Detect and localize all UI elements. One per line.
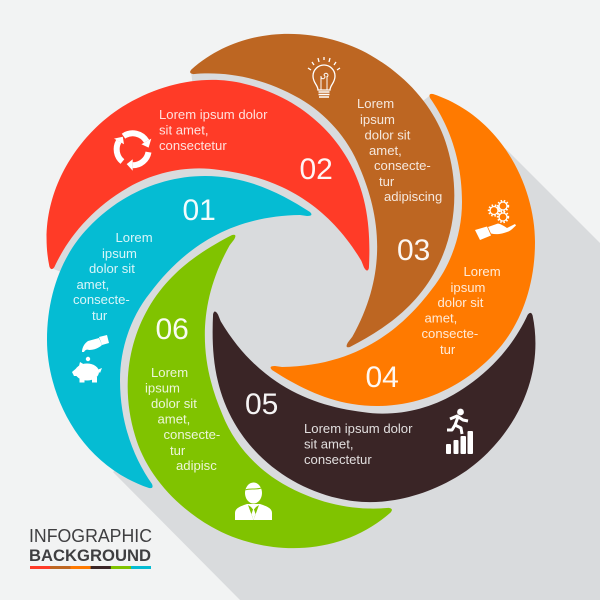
number 04: 04 xyxy=(366,361,399,394)
text block 02: Lorem ipsum dolor xyxy=(159,107,268,122)
text block 04: amet, xyxy=(424,310,457,326)
text block 02: consectetur xyxy=(159,138,227,153)
text block 04: Lorem xyxy=(464,264,501,279)
icon: hand and piggy bank xyxy=(72,335,109,382)
panel: 02 red xyxy=(0,22,401,407)
text block 01: amet, xyxy=(76,277,109,292)
text block 01: consecte- xyxy=(73,292,130,307)
colour bar xyxy=(30,566,151,569)
text block 06: tur xyxy=(170,443,186,458)
number 05: 05 xyxy=(245,388,278,421)
text block 03: dolor sit xyxy=(364,128,411,142)
text block 06: amet, xyxy=(158,412,190,426)
text block 04 xyxy=(422,264,501,357)
text block 02 xyxy=(159,107,268,153)
text block 03: Lorem xyxy=(357,96,394,111)
text block 06: consecte- xyxy=(164,427,220,442)
gap bands xyxy=(60,33,522,549)
text block 06: ipsum xyxy=(145,380,180,396)
text block 01: ipsum xyxy=(102,246,137,261)
icon: hand with gears xyxy=(475,201,516,240)
icon: light bulb xyxy=(308,57,340,97)
text block 05: Lorem ipsum dolor xyxy=(304,421,413,436)
text block 05: sit amet, xyxy=(304,436,353,452)
text block 01: Lorem xyxy=(116,230,153,245)
icon: runner on bars xyxy=(446,409,473,454)
number 03: 03 xyxy=(397,234,430,267)
text block 03: adipiscing xyxy=(384,189,442,204)
text block 01: dolor sit xyxy=(89,261,135,276)
text block 03: amet, xyxy=(369,143,402,158)
text block 03: tur xyxy=(379,174,395,189)
text block 06: dolor sit xyxy=(151,396,197,411)
title xyxy=(29,525,152,565)
number 06: 06 xyxy=(156,313,189,346)
text block 06: adipisc xyxy=(176,458,217,473)
title: BACKGROUND xyxy=(29,546,151,565)
text block 04: ipsum xyxy=(450,280,486,295)
panel: 04 orange xyxy=(271,94,535,406)
panel: 01 blue xyxy=(47,176,311,488)
panel: 05 dark xyxy=(181,175,584,560)
text block 05: consectetur xyxy=(304,452,372,467)
text block 04: dolor sit xyxy=(438,295,484,310)
long shadow xyxy=(113,148,600,600)
title: INFOGRAPHIC xyxy=(29,525,152,546)
text block 05 xyxy=(304,421,413,467)
text block 06 xyxy=(145,365,220,473)
text block 03: ipsum xyxy=(360,112,395,127)
text block 03: consecte- xyxy=(374,158,431,173)
text block 03 xyxy=(357,96,442,204)
text block 04: consecte- xyxy=(422,326,478,341)
text block 01: tur xyxy=(92,308,108,323)
icon: businessman xyxy=(235,482,272,520)
text block 04: tur xyxy=(440,342,456,357)
text block 02: sit amet, xyxy=(159,122,208,138)
panel: 06 green xyxy=(69,216,472,600)
number 01: 01 xyxy=(182,194,216,227)
text block 06: Lorem xyxy=(151,365,188,380)
text block 01 xyxy=(73,230,153,323)
number 02: 02 xyxy=(300,153,333,186)
panel: 03 brown xyxy=(110,0,513,366)
icon: circular arrows xyxy=(114,133,151,171)
